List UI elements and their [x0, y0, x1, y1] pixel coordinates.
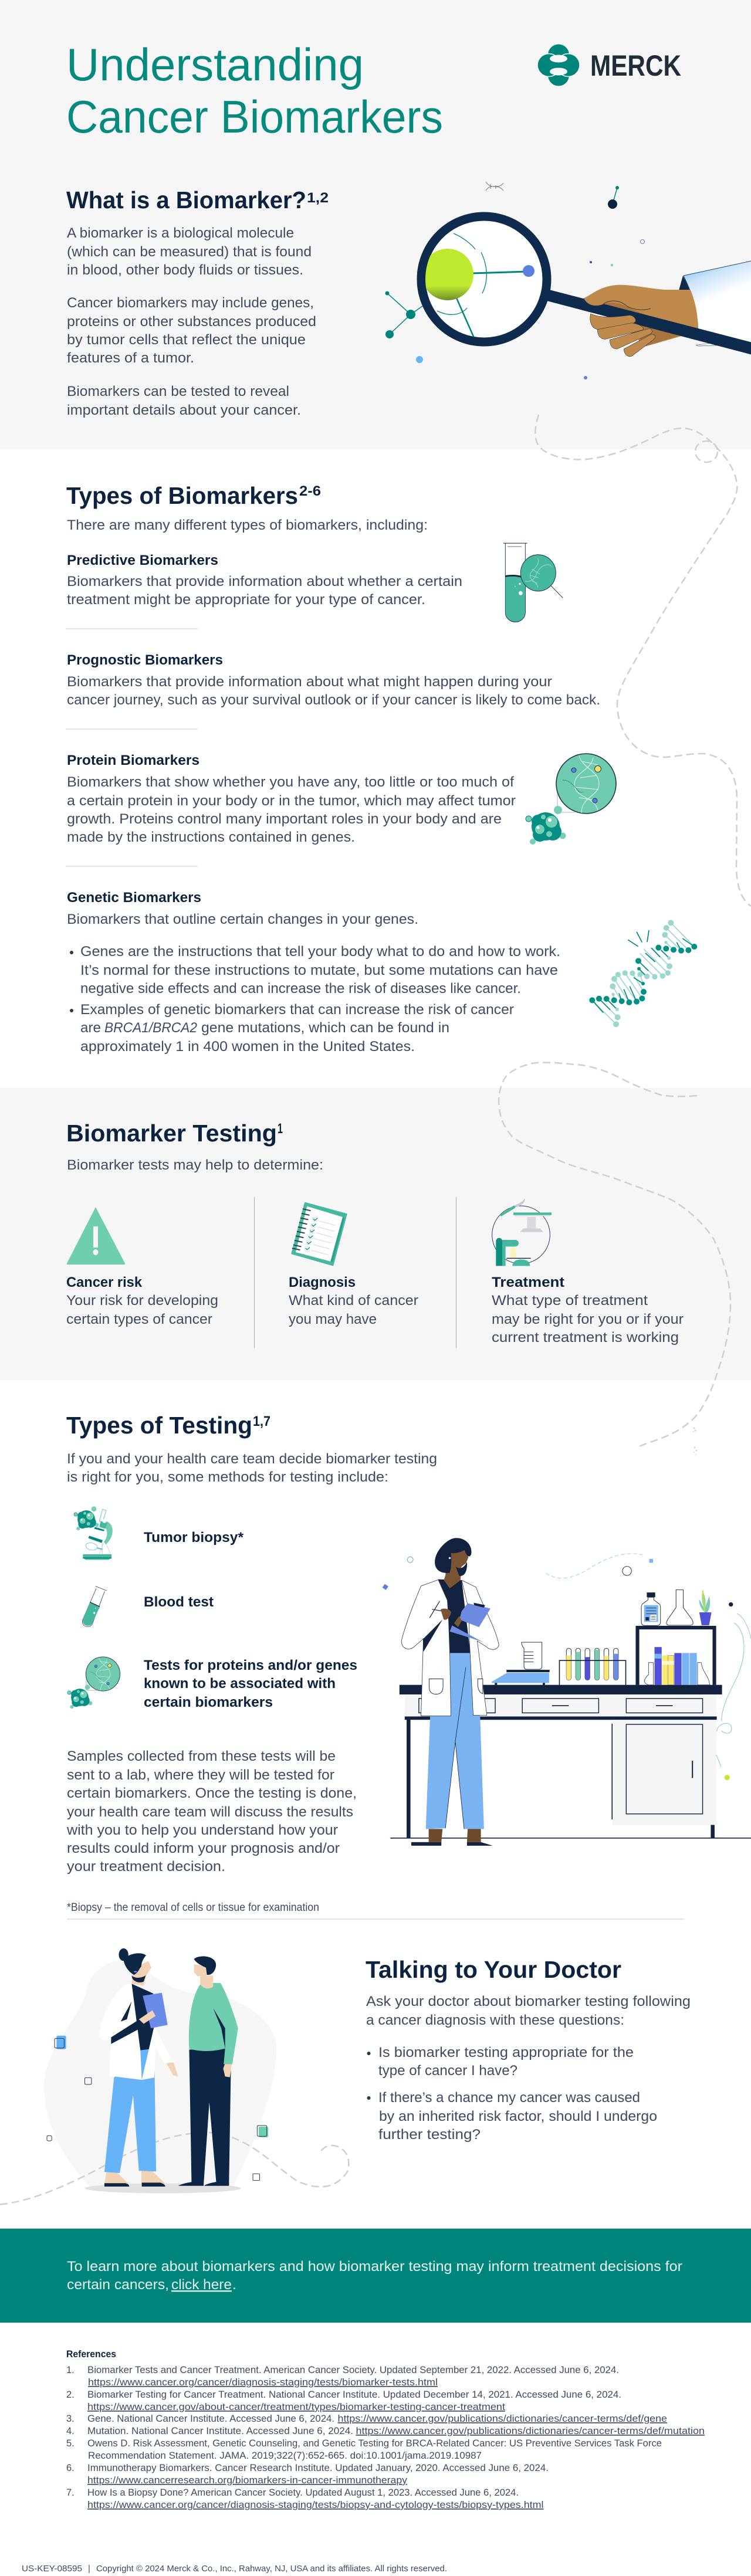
block: protein biomarkers: made by the instructions contained in genes. [67, 829, 355, 845]
title [66, 39, 443, 143]
column: diagnosis: Diagnosis [289, 1275, 356, 1290]
column: cancer risk [66, 1207, 218, 1327]
icon: microscope [74, 1506, 113, 1560]
banner: learn more [0, 2228, 751, 2323]
method: tests for proteins and genes [67, 1657, 357, 1710]
block: prognostic biomarkers: cancer journey, such as your survival outlook or if your cancer is likely to come back. [67, 692, 600, 708]
title: Cancer Biomarkers [66, 91, 443, 143]
references: Biomarker Tests and Cancer Treatment. American Cancer Society. Updated September 21, 2022. Accessed June 6, 2024. [87, 2365, 619, 2375]
illustration: scientist at lab bench [383, 1538, 751, 1846]
block: predictive biomarkers [67, 553, 462, 608]
list: questions [367, 2045, 657, 2143]
magnifier lens [421, 216, 547, 342]
references: https://www.cancer.gov/publications/dictionaries/cancer-terms/def/gene [338, 2414, 667, 2424]
heading: talking to your doctor: Talking to Your Doctor [366, 1956, 621, 1983]
text: ask your doctor: a cancer diagnosis with these questions: [366, 2012, 624, 2028]
banner: learn more: . [232, 2277, 236, 2293]
references: 3. [66, 2414, 75, 2424]
logo: Merck: MERCK [590, 49, 681, 82]
method: tests for proteins and genes: certain biomarkers [144, 1694, 273, 1710]
text: intro [67, 1451, 437, 1485]
references: https://www.cancerresearch.org/biomarkers-in-cancer-immunotherapy [87, 2475, 408, 2486]
heading: types of biomarkers: 2-6 [299, 483, 321, 499]
icon: protein and cell cluster small [67, 1657, 120, 1709]
references: Immunotherapy Biomarkers. Cancer Research Institute. Updated January, 2020. Accessed June 6, 2024. [87, 2463, 549, 2473]
block: genetic biomarkers: approximately 1 in 400 women in the United States. [80, 1039, 415, 1055]
text block: samples: with you to help you understand how your [66, 1822, 338, 1838]
text block: definition: Biomarkers can be tested to reveal [67, 384, 289, 399]
text block: definition: important details about your cancer. [67, 402, 301, 418]
text block: samples: sent to a lab, where they will be tested for [67, 1767, 334, 1783]
block: prognostic biomarkers [67, 652, 600, 708]
decorative particles [383, 1554, 751, 1780]
column: treatment: What type of treatment [492, 1293, 648, 1309]
block: genetic biomarkers: gene mutations, which can be found in [201, 1020, 449, 1036]
block: genetic biomarkers: Genes are the instructions that tell your body what to do and how to work. [80, 944, 560, 960]
references: References [66, 2349, 116, 2360]
footer: copyright: US-KEY-08595 [22, 2564, 82, 2574]
block: prognostic biomarkers: Prognostic Biomarkers [67, 652, 223, 668]
title: Understanding [66, 39, 364, 90]
text: ask your doctor: Ask your doctor about biomarker testing following [366, 1994, 691, 2009]
references: How Is a Biopsy Done? American Cancer Society. Updated August 1, 2023. Accessed June 6, 2024. [87, 2487, 519, 2498]
method: tests for proteins and genes: known to be associated with [144, 1676, 336, 1692]
patient [178, 1956, 238, 2186]
column: diagnosis: you may have [289, 1311, 377, 1327]
background blob [44, 1961, 276, 2188]
block: predictive biomarkers: Predictive Biomarkers [67, 553, 218, 568]
column: treatment [492, 1198, 684, 1345]
hand and sleeve [546, 261, 751, 357]
references: 7. [66, 2487, 75, 2498]
references: Mutation. National Cancer Institute. Accessed June 6, 2024. [87, 2426, 353, 2436]
list: questions: type of cancer I have? [378, 2063, 517, 2079]
block: genetic biomarkers: Genetic Biomarkers [67, 890, 201, 906]
column: treatment: current treatment is working [492, 1330, 679, 1345]
block: predictive biomarkers: treatment might be appropriate for your type of cancer. [67, 592, 425, 608]
references: Biomarker Testing for Cancer Treatment. National Cancer Institute. Updated December 14, 2021. Accessed June 6, 2024. [87, 2389, 621, 2400]
references: 5. [66, 2438, 75, 2449]
method: tests for proteins and genes: Tests for proteins and/or genes [144, 1658, 357, 1673]
shelf with books [638, 1628, 715, 1685]
footer: copyright: | [88, 2564, 90, 2574]
test tubes in rack [559, 1648, 626, 1685]
text: intro: If you and your health care team decide biomarker testing [67, 1451, 437, 1467]
references: Gene. National Cancer Institute. Accessed June 6, 2024. [87, 2414, 334, 2424]
icon: notebook checklist [292, 1203, 347, 1265]
doctor [99, 1948, 178, 2187]
column: cancer risk: Cancer risk [66, 1275, 143, 1290]
text block: samples: results could inform your prognosis and/or [67, 1841, 340, 1856]
block: protein biomarkers: growth. Proteins control many important roles in your body and are [67, 811, 502, 827]
column: treatment: may be right for you or if your [492, 1311, 684, 1327]
text block: samples: certain biomarkers. Once the testing is done, [67, 1785, 357, 1801]
references: 6. [66, 2463, 75, 2473]
method: blood test: Blood test [144, 1594, 214, 1610]
illustration: doctor and patient [0, 1948, 349, 2205]
column: treatment: Treatment [492, 1275, 564, 1290]
list: questions: If there’s a chance my cancer was caused [378, 2090, 640, 2106]
block: genetic biomarkers: Examples of genetic biomarkers that can increase the risk of cancer [80, 1002, 514, 1018]
icon: protein and cell cluster [526, 754, 616, 845]
text block: definition: features of a tumor. [67, 350, 194, 366]
bottle, flask and plant [641, 1590, 712, 1625]
icon: treatment equipment [492, 1198, 552, 1266]
column: diagnosis [289, 1203, 418, 1327]
icon: warning triangle [67, 1207, 125, 1265]
block: genetic biomarkers: It’s normal for these instructions to mutate, but some mutations can have [80, 962, 558, 978]
method: tumor biopsy [74, 1506, 244, 1560]
lab bench [390, 1685, 751, 1839]
text block: definition: proteins or other substances produced [67, 314, 316, 330]
block: genetic biomarkers: BRCA1/BRCA2 [104, 1020, 197, 1036]
block: protein biomarkers [67, 753, 516, 845]
block: genetic biomarkers: are [80, 1020, 101, 1036]
text block: samples: your treatment decision. [67, 1859, 225, 1875]
heading: types of testing: 1,7 [253, 1414, 270, 1429]
panel: talking to your doctor [0, 1948, 691, 2205]
panel: types of biomarkers [66, 482, 697, 1055]
text block: definition: A biomarker is a biological molecule [67, 225, 294, 241]
banner: learn more: click here [171, 2277, 232, 2293]
decorative path: dashed journey line upper [535, 415, 751, 906]
references [66, 2349, 705, 2510]
list: questions: Is biomarker testing appropriate for the [378, 2045, 634, 2060]
floating shapes [47, 2036, 268, 2181]
heading: biomarker testing: Biomarker Testing [66, 1120, 277, 1147]
decorative path: dashed journey line middle [499, 1063, 730, 1455]
icon: angled test tube [82, 1586, 107, 1627]
text block: samples [66, 1748, 357, 1875]
block: prognostic biomarkers: Biomarkers that provide information about what might happen during your [67, 674, 552, 690]
floor shadow [84, 2184, 241, 2193]
block: predictive biomarkers: Biomarkers that provide information about whether a certain [67, 574, 462, 589]
heading: types of biomarkers: Types of Biomarkers [66, 482, 298, 509]
references: https://www.cancer.gov/about-cancer/treatment/types/biomarker-testing-cancer-treatment [87, 2402, 505, 2412]
panel: what is a biomarker [0, 0, 751, 449]
heading: biomarker testing: 1 [278, 1121, 283, 1137]
dashed swirl line [0, 2133, 349, 2205]
footer: copyright: Copyright © 2024 Merck & Co., Inc., Rahway, NJ, USA and its affiliates. All rights reserved. [96, 2564, 447, 2574]
block: protein biomarkers: Protein Biomarkers [67, 753, 199, 768]
text block: definition: Cancer biomarkers may include genes, [67, 295, 314, 311]
scientist [401, 1538, 499, 1846]
icon: DNA strand [589, 920, 697, 1027]
heading: what is a biomarker: 1,2 [307, 190, 329, 206]
references: 1. [66, 2365, 75, 2375]
text: intro: There are many different types of biomarkers, including: [67, 517, 428, 533]
panel: types of testing [66, 1412, 751, 1920]
list: questions: further testing? [378, 2127, 481, 2143]
scale and beaker [492, 1642, 550, 1685]
block: genetic biomarkers: negative side effects and can increase the risk of diseases like cancer. [80, 981, 521, 996]
text block: samples: your health care team will discuss the results [67, 1804, 353, 1820]
text block: definition: (which can be measured) that is found [67, 244, 312, 260]
text: intro: Biomarker tests may help to determine: [67, 1157, 323, 1173]
text block: definition: by tumor cells that reflect the unique [67, 332, 306, 348]
text block: definition: in blood, other body fluids or tissues. [67, 262, 303, 278]
text block: samples: Samples collected from these tests will be [67, 1748, 336, 1764]
references: https://www.cancer.org/cancer/diagnosis-staging/tests/biopsy-and-cytology-tests/biopsy-types.html [87, 2500, 543, 2510]
block: protein biomarkers: a certain protein in your body or in the tumor, which may affect tumor [67, 793, 516, 809]
illustration: magnifying glass and hand [385, 182, 751, 379]
banner: learn more: certain cancers, [67, 2277, 169, 2293]
panel: biomarker testing [0, 1088, 751, 1380]
list: questions: by an inherited risk factor, should I undergo [379, 2109, 657, 2124]
heading: types of testing: Types of Testing [66, 1412, 252, 1439]
footnote: biopsy: *Biopsy – the removal of cells or tissue for examination [67, 1902, 319, 1914]
icon: test tube with DNA magnifier [503, 543, 563, 622]
references: Owens D. Risk Assessment, Genetic Counseling, and Genetic Testing for BRCA-Related Cancer: US Preventive Services Task Force [87, 2438, 662, 2449]
column: diagnosis: What kind of cancer [289, 1293, 418, 1309]
text block: definition [67, 225, 316, 418]
block: genetic biomarkers: Biomarkers that outline certain changes in your genes. [67, 911, 418, 927]
column: cancer risk: Your risk for developing [66, 1293, 218, 1309]
references: 2. [66, 2389, 75, 2400]
block: genetic biomarkers [67, 890, 560, 1055]
block: protein biomarkers: Biomarkers that show whether you have any, too little or too much of [67, 774, 514, 790]
logo: Merck [537, 45, 681, 86]
references: 4. [66, 2426, 75, 2436]
method: tumor biopsy: Tumor biopsy* [144, 1530, 244, 1545]
banner: learn more: To learn more about biomarkers and how biomarker testing may inform treatment decisions for [67, 2259, 682, 2275]
references: Recommendation Statement. JAMA. 2019;322(7):652-665. doi:10.1001/jama.2019.10987 [88, 2450, 482, 2461]
references: https://www.cancer.org/cancer/diagnosis-staging/tests/biomarker-tests.html [88, 2377, 438, 2388]
column: cancer risk: certain types of cancer [66, 1311, 212, 1327]
text: ask your doctor [366, 1994, 691, 2028]
references: https://www.cancer.gov/publications/dictionaries/cancer-terms/def/mutation [356, 2426, 705, 2436]
method: blood test [82, 1586, 214, 1627]
text: intro: is right for you, some methods for testing include: [67, 1469, 388, 1485]
heading: what is a biomarker: What is a Biomarker? [66, 187, 306, 213]
